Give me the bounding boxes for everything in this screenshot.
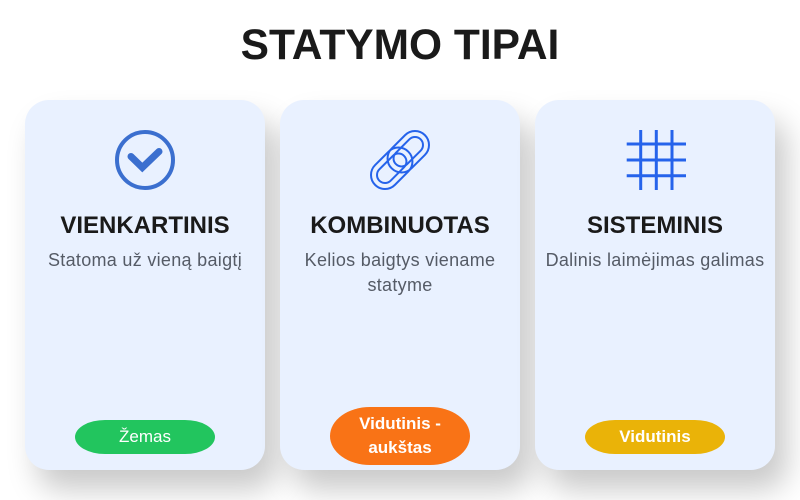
badge: medium	[585, 420, 725, 454]
description	[305, 250, 495, 295]
description: Dalinis laimėjimas galimas	[546, 250, 764, 270]
description: Kelios baigtys viename	[305, 250, 495, 270]
heading: SISTEMINIS	[587, 212, 723, 239]
icon: grid	[626, 130, 686, 190]
panel: kombinuotas	[280, 100, 520, 470]
icon: check circle	[115, 130, 175, 190]
description: statyme	[367, 274, 433, 294]
badge: low	[75, 420, 215, 454]
badge: medium: Vidutinis	[619, 427, 691, 446]
badge: medium-high: aukštas	[368, 438, 432, 457]
title: STATYMO TIPAI	[241, 22, 559, 69]
icon: chain link	[370, 130, 430, 190]
heading: VIENKARTINIS	[60, 212, 230, 239]
heading: KOMBINUOTAS	[310, 212, 490, 239]
panel: sisteminis	[535, 100, 775, 470]
badge: medium-high: Vidutinis -	[359, 414, 441, 433]
badge: low: Žemas	[119, 427, 171, 446]
panel: vienkartinis	[25, 100, 265, 470]
description: Statoma už vieną baigtį	[48, 250, 242, 270]
badge: medium-high	[330, 407, 470, 465]
